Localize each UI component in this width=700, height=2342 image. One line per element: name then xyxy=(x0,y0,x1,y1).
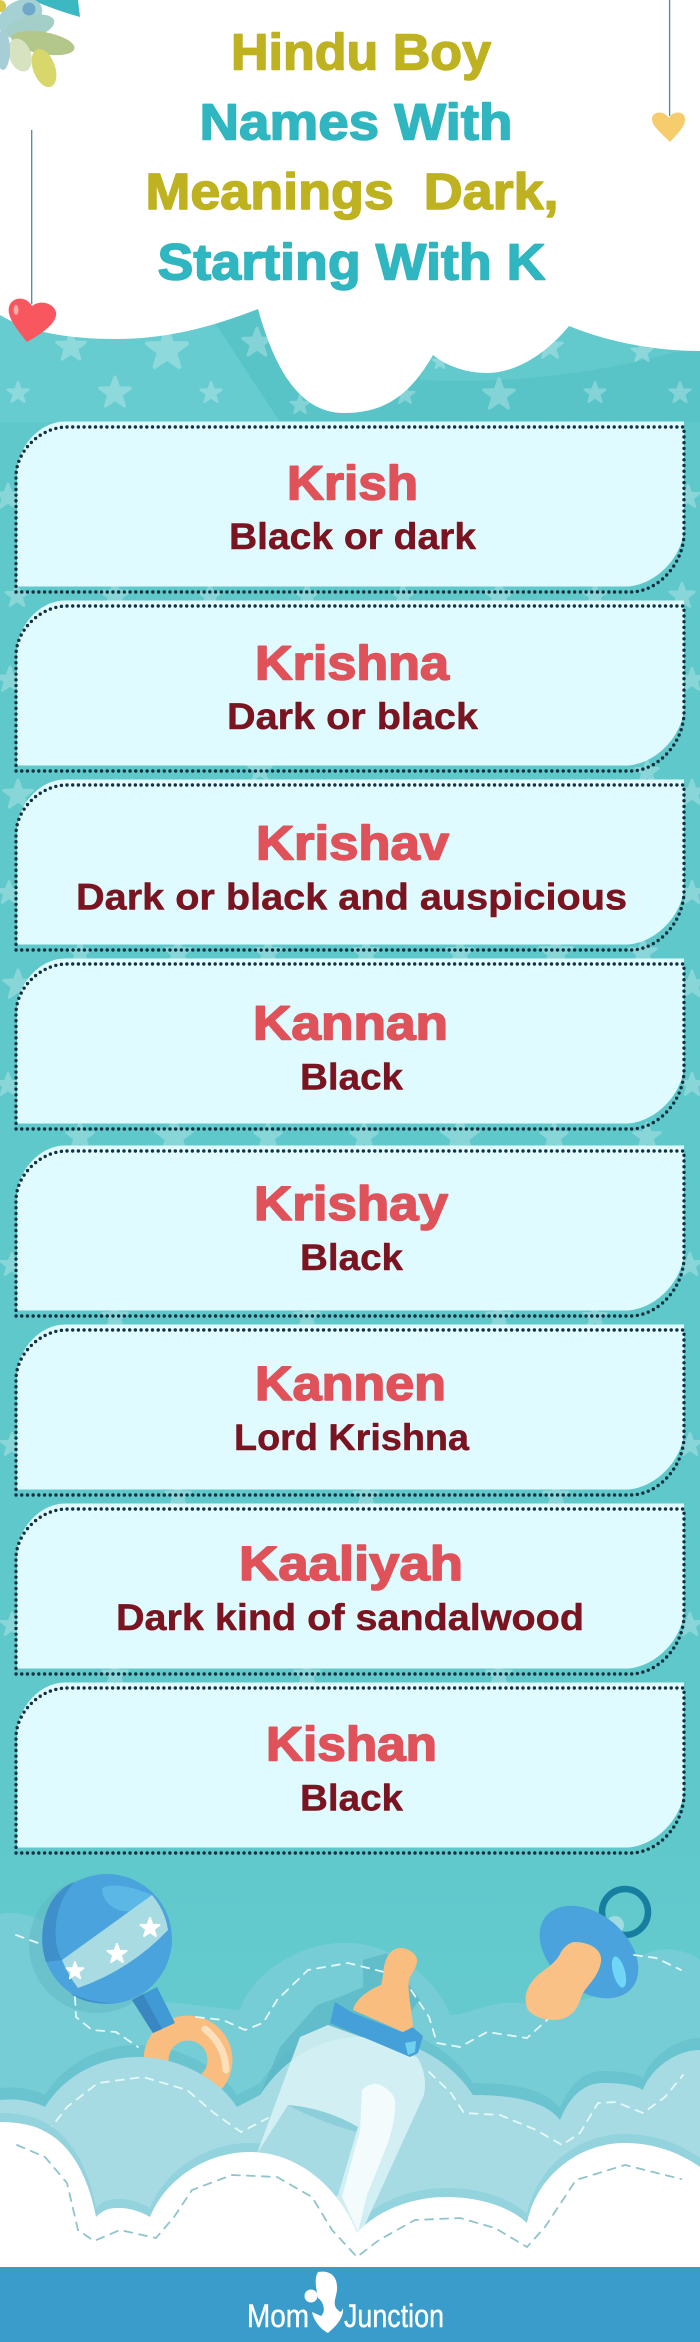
logo: MomJunction xyxy=(247,2272,444,2334)
white cloud shadow xyxy=(0,2113,700,2333)
panel: Kishan: Kishan xyxy=(266,1718,437,1772)
panel: Krishav xyxy=(16,780,684,950)
panel: Krish: Black or dark xyxy=(229,516,476,557)
panel: Krishay: Krishay xyxy=(254,1178,448,1231)
panel: Kannan: Black xyxy=(300,1056,403,1098)
icon: pacifier xyxy=(522,1887,656,2020)
icon: hanging red heart xyxy=(9,130,56,342)
logo: MomJunction: Mom xyxy=(247,2298,309,2334)
title: Hindu Boy xyxy=(231,24,492,80)
icon: watercolor leaves xyxy=(0,0,76,91)
panel: Kannan xyxy=(16,958,684,1129)
panel: Kaaliyah: Kaaliyah xyxy=(239,1538,463,1591)
panel: Krishay: Black xyxy=(300,1237,403,1278)
icon: baby bottle xyxy=(225,1948,425,2240)
icon: rattle xyxy=(29,1874,226,2092)
light blue cloud xyxy=(0,2037,700,2342)
icon: hanging yellow heart xyxy=(652,0,685,142)
title: Names With xyxy=(200,94,512,150)
panel: Kaaliyah: Dark kind of sandalwood xyxy=(116,1597,584,1638)
white foreground cloud xyxy=(0,2122,700,2342)
panel: Krishna: Krishna xyxy=(255,638,449,690)
title xyxy=(146,24,558,290)
panel: Krishav: Krishav xyxy=(256,818,449,870)
panel: Krishav: Dark or black and auspicious xyxy=(76,876,627,918)
panel: Kannan: Kannan xyxy=(253,998,448,1050)
dashed thread on white cloud xyxy=(17,2145,681,2257)
corner teal wedge xyxy=(32,0,80,17)
panel: Kannen: Lord Krishna xyxy=(234,1417,469,1458)
back cloud layer xyxy=(0,1913,700,2342)
footer band xyxy=(0,2267,700,2342)
dashed thread on light cloud xyxy=(47,2072,683,2145)
background shading xyxy=(0,300,700,422)
logo: MomJunction: Junction xyxy=(344,2298,444,2334)
darker cloud edge xyxy=(0,2025,700,2330)
panel: Kannen xyxy=(16,1324,684,1495)
panel: Kannen: Kannen xyxy=(255,1358,446,1411)
panel: Kaaliyah xyxy=(16,1504,684,1674)
white header cloud xyxy=(0,0,700,413)
panel: Kishan: Black xyxy=(300,1778,403,1818)
panel: Krish xyxy=(16,422,684,592)
dashed thread xyxy=(16,1935,681,2047)
bottom scene background xyxy=(0,1858,700,2270)
panel: Kishan xyxy=(16,1682,684,1853)
panel: Krishay xyxy=(16,1146,684,1316)
star pattern xyxy=(0,328,700,1686)
panel: Krishna: Dark or black xyxy=(227,696,478,737)
title: Meanings Dark, xyxy=(146,163,558,220)
panel: Krishna xyxy=(16,600,684,771)
bottle shadow xyxy=(237,1953,420,2150)
title: Starting With K xyxy=(158,234,546,290)
panel: Krish: Krish xyxy=(287,458,418,510)
